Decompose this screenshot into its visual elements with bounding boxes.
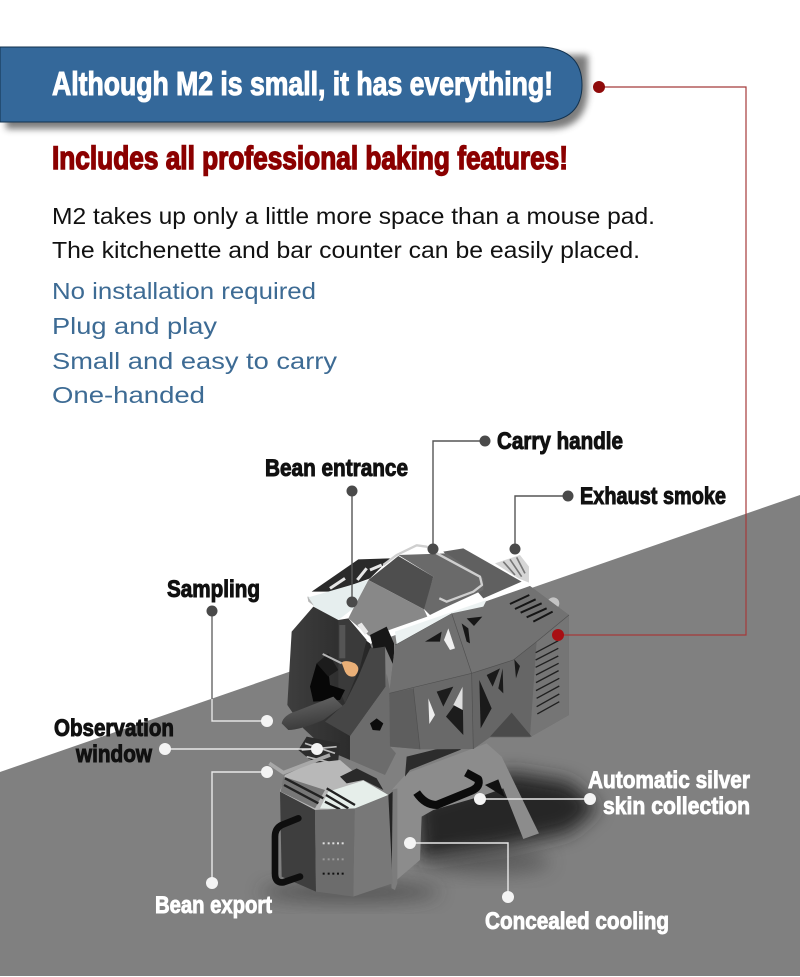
bean bin	[269, 737, 393, 897]
callout: exhaust smoke: Exhaust smoke	[580, 483, 726, 510]
carry handle bar	[383, 545, 482, 602]
top frame	[312, 558, 390, 592]
housing cutouts	[425, 632, 442, 642]
benefits list: Plug and play	[52, 313, 217, 339]
description text: The kitchenette and bar counter can be easily placed.	[52, 237, 640, 263]
main drum housing	[389, 586, 569, 749]
white top strip	[395, 600, 487, 644]
bean entrance panels	[348, 580, 427, 637]
callout: exhaust smoke	[510, 483, 726, 554]
bin holes	[323, 842, 344, 844]
callout: observation window: Observation	[54, 715, 174, 742]
hopper	[398, 553, 483, 615]
rear panel and exhaust	[282, 545, 569, 775]
callout: bean export	[155, 766, 273, 919]
callout: bean entrance	[265, 455, 408, 608]
callout: bean entrance: Bean entrance	[265, 455, 408, 482]
callout: observation window: window	[75, 741, 152, 768]
machine shadow	[260, 772, 598, 902]
left body	[287, 607, 385, 760]
bin handle	[275, 818, 300, 882]
callout: concealed cooling	[404, 837, 669, 935]
header banner	[0, 47, 588, 129]
silver skin handle	[417, 773, 479, 805]
red connector line	[552, 81, 746, 641]
header banner: Although M2 is small, it has everything!	[52, 65, 553, 102]
callout: carry handle: Carry handle	[497, 428, 623, 455]
callout: carry handle	[428, 428, 623, 554]
callout: sampling	[167, 576, 273, 727]
stand and legs	[382, 740, 539, 890]
callout: automatic silver skin collection	[474, 767, 750, 820]
benefits list	[52, 278, 337, 408]
callout: automatic silver skin collection: Automatic silver	[588, 767, 750, 794]
sampling spoon handle	[282, 697, 343, 730]
callout: automatic silver skin collection: skin collection	[603, 793, 750, 820]
subheading: Includes all professional baking features!	[52, 140, 568, 176]
benefits list: One-handed	[52, 382, 205, 408]
callout: sampling: Sampling	[167, 576, 260, 603]
callout: concealed cooling: Concealed cooling	[485, 908, 669, 935]
description text: M2 takes up only a little more space than a mouse pad.	[52, 203, 655, 229]
roaster machine illustration	[269, 545, 569, 897]
description text	[52, 203, 655, 263]
side vent slots	[536, 641, 559, 714]
sampler knob	[323, 654, 342, 663]
callout: observation window	[54, 715, 323, 768]
grey diagonal background	[0, 495, 800, 976]
callout: bean export: Bean export	[155, 892, 272, 919]
benefits list: Small and easy to carry	[52, 348, 337, 374]
top vent slots	[510, 595, 553, 622]
benefits list: No installation required	[52, 278, 316, 304]
front dark panel	[325, 643, 386, 736]
